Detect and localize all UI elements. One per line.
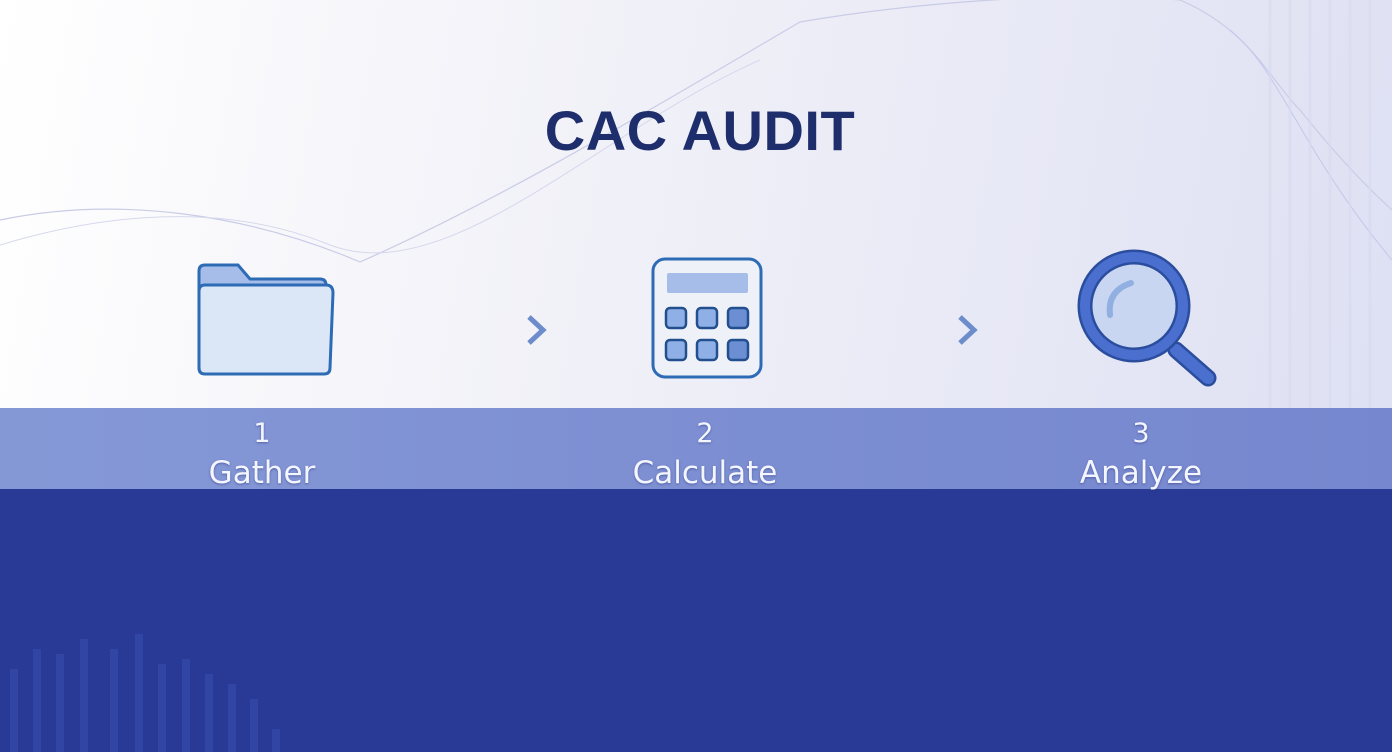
arrow 2 bbox=[958, 315, 978, 345]
step 1 label bbox=[209, 418, 316, 491]
step 2 label bbox=[633, 418, 777, 491]
step 1 label: 1 bbox=[253, 418, 271, 449]
step 2 label: Calculate bbox=[633, 455, 777, 491]
title: CAC AUDIT bbox=[545, 99, 855, 162]
label band bbox=[0, 408, 1392, 489]
step 3 label: 3 bbox=[1132, 418, 1150, 449]
icon: calculator bbox=[652, 258, 762, 378]
step 2 label: 2 bbox=[696, 418, 714, 449]
arrow 1 bbox=[527, 315, 546, 345]
icon: folder bbox=[198, 264, 334, 376]
step 1 label: Gather bbox=[209, 455, 315, 491]
icon: magnifier bbox=[1078, 250, 1216, 386]
step 3 label bbox=[1080, 418, 1202, 491]
step 3 label: Analyze bbox=[1080, 455, 1202, 491]
dark bottom panel bbox=[0, 489, 1392, 752]
